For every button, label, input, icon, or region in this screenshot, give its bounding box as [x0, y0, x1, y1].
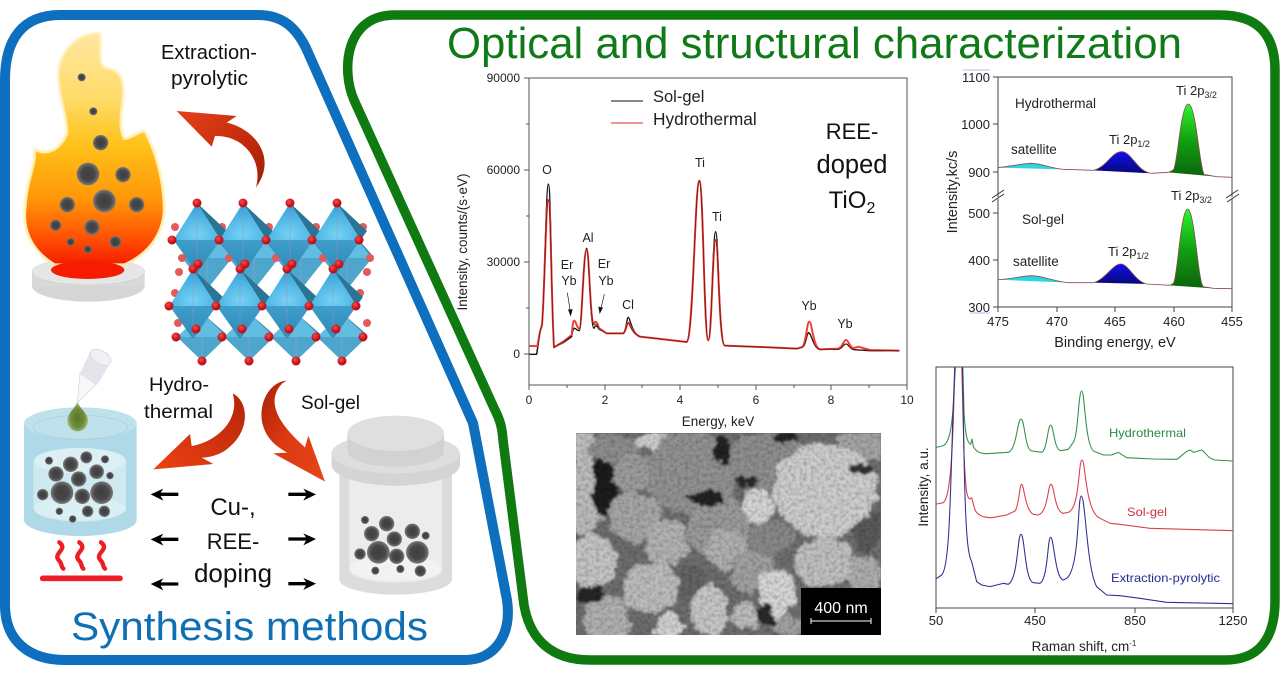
chart: EDX spectrum: 60000	[487, 163, 520, 177]
chart: EDX spectrum: Sol-gel	[653, 88, 704, 106]
chart: XPS spectra: 465	[1104, 314, 1126, 329]
icon: heat source	[43, 542, 120, 578]
chart: XPS spectra: 500	[968, 206, 990, 221]
chart: Raman spectra: Raman shift, cm	[1032, 639, 1129, 654]
chart: XPS spectra: Ti 2p	[1108, 244, 1136, 259]
chart: EDX spectrum: 4	[677, 393, 684, 407]
text: doping	[194, 494, 272, 588]
label: hydrothermal: thermal	[144, 402, 213, 423]
chart: EDX spectrum: O	[542, 163, 552, 177]
label: extraction-pyrolytic	[161, 42, 257, 90]
arrows: doping right	[288, 489, 316, 590]
label: hydrothermal	[144, 375, 213, 423]
chart: XPS spectra: 3/2	[1204, 90, 1217, 100]
chart: EDX spectrum: 90000	[487, 71, 520, 85]
crystal structure	[164, 198, 374, 366]
text: REE-doped TiO2: TiO	[829, 187, 866, 214]
chart: Raman spectra: -1	[1129, 639, 1137, 648]
chart: XPS spectra: 900	[968, 165, 990, 180]
chart: XPS spectra: Binding energy, eV	[1054, 335, 1176, 351]
chart: EDX spectrum: 2	[602, 393, 609, 407]
chart: XPS spectra: Ti 2p	[1176, 83, 1204, 98]
chart: Raman spectra: Intensity, a.u.	[916, 447, 931, 527]
text: REE-doped TiO2: doped	[817, 151, 887, 179]
label: extraction-pyrolytic: pyrolytic	[171, 68, 248, 90]
chart: XPS spectra: 400	[968, 253, 990, 268]
chart: XPS spectra: Sol-gel	[1022, 212, 1064, 227]
chart: EDX spectrum: Yb	[598, 274, 614, 288]
icon: hydrothermal beaker with pipette	[24, 346, 137, 536]
arrow: to hydrothermal	[153, 393, 245, 469]
chart: EDX spectrum: 30000	[487, 255, 520, 269]
chart: XPS spectra	[945, 70, 1243, 351]
panel: synthesis methods outline	[5, 15, 508, 660]
chart: XPS spectra: satellite	[1013, 254, 1059, 269]
chart: XPS spectra: 3/2	[1199, 195, 1212, 205]
chart: EDX spectrum: Al	[582, 231, 594, 245]
icon: flame on burner	[26, 35, 163, 302]
icon: sol-gel jar	[332, 416, 460, 595]
arrows: doping left	[151, 489, 178, 590]
chart: XPS spectra: 1000	[961, 117, 990, 132]
chart: XPS spectra: satellite	[1011, 142, 1057, 157]
chart: XPS spectra: 455	[1221, 314, 1243, 329]
chart: XPS spectra: 1/2	[1136, 251, 1149, 261]
text: REE-doped TiO2: REE-	[826, 119, 878, 144]
chart: XPS spectra: 300	[968, 300, 990, 315]
chart: EDX spectrum	[455, 71, 914, 429]
chart: XPS spectra: 475	[987, 314, 1009, 329]
heading: synthesis methods: Synthesis methods	[71, 605, 428, 649]
chart: EDX spectrum: Intensity, counts/(s·eV)	[455, 173, 470, 311]
chart: EDX spectrum: Yb	[801, 299, 817, 313]
chart: Raman spectra	[916, 362, 1247, 654]
chart: EDX spectrum: Yb	[561, 274, 577, 288]
chart: EDX spectrum: 10	[900, 393, 914, 407]
chart: XPS spectra: 470	[1046, 314, 1068, 329]
text: REE-doped TiO2: 2	[866, 200, 875, 217]
chart: Raman spectra: 850	[1124, 613, 1146, 628]
text: doping: REE-	[207, 529, 259, 554]
chart: EDX spectrum: Energy, keV	[682, 414, 754, 429]
chart: EDX spectrum: 0	[513, 347, 520, 361]
chart: EDX spectrum: 0	[526, 393, 533, 407]
chart: XPS spectra: Intensity,kc/s	[945, 151, 961, 233]
image: SEM micrograph: 400 nm	[814, 600, 868, 617]
arrow: to extraction-pyrolytic	[177, 111, 265, 187]
chart: EDX spectrum: 6	[753, 393, 760, 407]
text: doping: doping	[194, 558, 272, 588]
image: SEM micrograph	[576, 433, 881, 635]
label: hydrothermal: Hydro-	[149, 375, 209, 396]
text: doping: Cu-,	[210, 494, 256, 521]
title: Optical and structural characterization	[447, 19, 1182, 68]
chart: Raman spectra: Sol-gel	[1127, 505, 1167, 519]
chart: XPS spectra: 1100	[962, 70, 990, 85]
label: extraction-pyrolytic: Extraction-	[161, 42, 257, 64]
text: REE-doped TiO2	[817, 119, 887, 217]
arrow: to sol-gel	[261, 381, 325, 482]
chart: EDX spectrum: Ti	[695, 156, 705, 170]
label: sol-gel: Sol-gel	[301, 393, 360, 414]
chart: EDX spectrum: Er	[598, 257, 610, 271]
chart: EDX spectrum: Ti	[712, 210, 722, 224]
chart: EDX spectrum: Er	[561, 258, 573, 272]
chart: XPS spectra: 1/2	[1137, 139, 1150, 149]
chart: XPS spectra: 460	[1163, 314, 1185, 329]
chart: EDX spectrum: 8	[828, 393, 835, 407]
chart: XPS spectra: Hydrothermal	[1015, 96, 1096, 111]
chart: EDX spectrum: Hydrothermal	[653, 109, 757, 129]
chart: EDX spectrum: Yb	[837, 317, 853, 331]
chart: XPS spectra: Ti 2p	[1171, 188, 1199, 203]
chart: Raman spectra: 1250	[1219, 613, 1247, 628]
chart: EDX spectrum: Cl	[622, 298, 634, 312]
chart: XPS spectra: Ti 2p	[1109, 132, 1137, 147]
chart: Raman spectra: 450	[1024, 613, 1046, 628]
chart: Raman spectra: 50	[929, 613, 943, 628]
chart: Raman spectra: Hydrothermal	[1109, 426, 1186, 440]
panel: characterization outline	[348, 15, 1275, 660]
chart: Raman spectra: Extraction-pyrolytic	[1111, 571, 1220, 585]
